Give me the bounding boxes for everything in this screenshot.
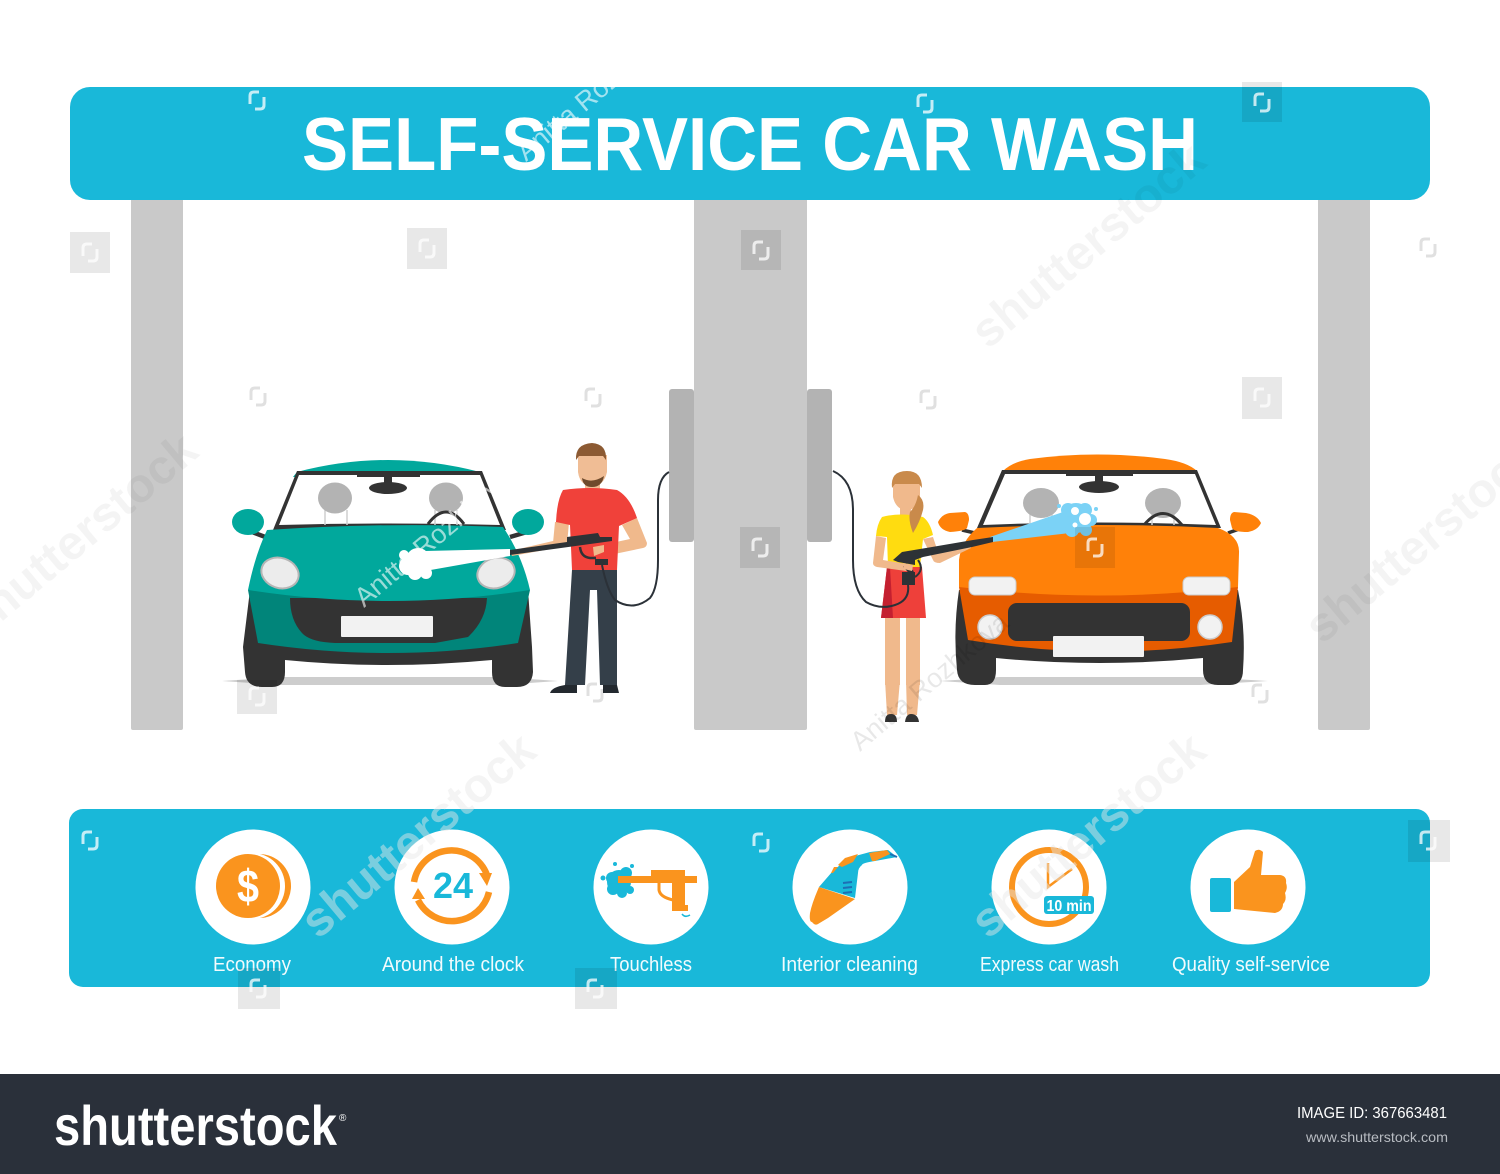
- icon: spray gun: [594, 830, 708, 944]
- image id: IMAGE ID: 367663481: [1297, 1105, 1447, 1122]
- registered mark: ®: [339, 1113, 347, 1124]
- watermark overlay: Anitta Rozhkova: [349, 463, 519, 613]
- icon: express clock: [992, 830, 1106, 944]
- title: SELF-SERVICE CAR WASH: [302, 102, 1198, 186]
- labels: Interior cleaning: [781, 954, 918, 976]
- labels: Express car wash: [980, 954, 1119, 976]
- website: www.shutterstock.com: [1305, 1129, 1448, 1145]
- icon: express clock: 10 min: [1046, 898, 1092, 915]
- watermark overlay: Anitta Rozhkova: [845, 607, 1015, 757]
- watermark overlay: shutterstock: [961, 132, 1216, 358]
- woman: [873, 471, 993, 722]
- orange car: [938, 454, 1268, 685]
- icon: coin: [196, 830, 310, 944]
- watermark overlay: Anitta Rozhkova: [511, 17, 681, 167]
- title banner: [70, 87, 1430, 200]
- labels: [213, 954, 1330, 976]
- footer logo: shutterstock: [54, 1094, 338, 1157]
- icon: around the clock: 24: [433, 865, 473, 906]
- hose right: [833, 471, 908, 607]
- labels: Around the clock: [382, 954, 525, 976]
- icon: around the clock: [394, 830, 510, 944]
- water spray on green car: [399, 548, 510, 580]
- labels: Touchless: [610, 954, 692, 976]
- labels: Quality self-service: [1172, 954, 1330, 976]
- labels: Economy: [213, 954, 291, 976]
- pillars: [131, 198, 1370, 730]
- features panel: [69, 809, 1430, 987]
- footer bar: [0, 1074, 1500, 1174]
- watermark overlay: shutterstock: [961, 722, 1216, 948]
- icon: thumbs up: [1190, 830, 1306, 944]
- watermark overlay: shutterstock: [961, 722, 1216, 948]
- man: [510, 443, 647, 693]
- watermark overlay: shutterstock: [291, 722, 546, 948]
- watermark overlay: shutterstock: [291, 722, 546, 948]
- water spray on orange car: [990, 503, 1098, 542]
- icon: coin: $: [237, 860, 259, 912]
- icon: vacuum: [792, 830, 908, 944]
- green car: [222, 460, 558, 687]
- hose left: [602, 472, 669, 606]
